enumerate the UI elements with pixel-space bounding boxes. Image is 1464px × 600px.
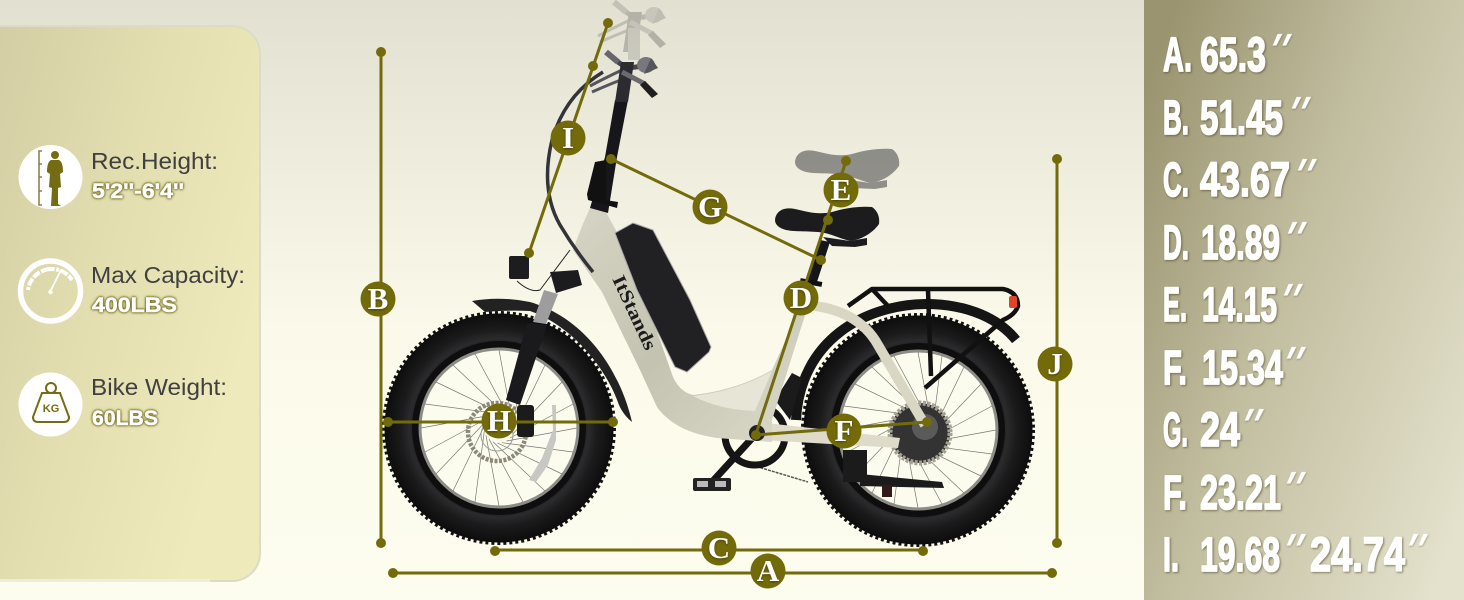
dimension D: D. — [1163, 217, 1189, 270]
badge B — [360, 281, 396, 316]
saddle — [775, 207, 879, 247]
text: max capacity: Max Capacity: — [91, 262, 245, 288]
dimension line A — [388, 568, 1057, 578]
badge H: H — [487, 403, 511, 438]
dimension B — [1163, 87, 1318, 146]
icon: rider height — [18, 145, 82, 209]
dimension C: " — [1277, 149, 1324, 208]
badge C: C — [708, 530, 730, 565]
dimension G: 24 — [1200, 404, 1240, 457]
dimension B: " — [1271, 87, 1318, 146]
dimension F — [1163, 337, 1313, 396]
rear drivetrain and kickstand — [775, 373, 944, 497]
brake cable — [548, 72, 603, 272]
dimension C: 43.67 — [1200, 154, 1290, 207]
dimension lines D and E — [756, 156, 851, 434]
panel: rider specifications — [0, 26, 260, 581]
badge B: B — [368, 281, 388, 316]
chainring and crank with pedal — [693, 405, 785, 491]
rear wheel — [802, 314, 1034, 546]
dimension F second: " — [1266, 462, 1313, 521]
dimension B: B. — [1163, 92, 1189, 145]
icon: bike weight kilogram: KG — [43, 403, 59, 415]
badge A — [750, 553, 786, 588]
dimension A — [1163, 24, 1299, 83]
fork head block — [550, 270, 582, 293]
badge J — [1038, 346, 1072, 382]
bottom bracket — [749, 425, 765, 441]
badge C — [702, 530, 736, 566]
text: recommended height: Rec.Height: — [91, 148, 218, 174]
dimension line G — [606, 154, 826, 265]
seat post — [805, 240, 830, 285]
dimension E: 14.15 — [1202, 279, 1277, 332]
dimension D — [1163, 212, 1314, 271]
rear fender — [796, 304, 1016, 420]
badge E: E — [831, 172, 851, 207]
dimension I: I. — [1163, 529, 1179, 582]
text: max capacity: 400LBS — [92, 294, 177, 317]
dimension I — [1163, 524, 1435, 583]
frame chain stay — [762, 423, 900, 448]
text: max capacity — [91, 262, 245, 317]
frame top stay — [806, 305, 925, 425]
dimension G — [1163, 399, 1271, 458]
text: bike weight: 60LBS — [92, 407, 158, 430]
ghost raised handlebar — [598, 2, 666, 60]
dimension F: 15.34 — [1202, 342, 1283, 395]
handlebar — [590, 52, 658, 102]
dimension I: 19.68 — [1200, 529, 1280, 582]
badge G: G — [698, 189, 722, 224]
dimension B: 51.45 — [1200, 92, 1283, 145]
badge I: I — [562, 120, 574, 155]
dimension E: " — [1263, 274, 1310, 333]
badge D — [784, 280, 818, 316]
dimension A: A. — [1163, 29, 1192, 82]
dimension C — [1163, 149, 1324, 208]
fork stanchion — [533, 290, 558, 324]
dimension E — [1163, 274, 1310, 333]
tail light — [1009, 296, 1017, 308]
dimension line I — [524, 18, 613, 258]
rear disc and motor — [890, 403, 950, 463]
dimension G: " — [1224, 399, 1271, 458]
stem — [590, 100, 628, 213]
front brake disc — [468, 403, 526, 461]
rear rack — [848, 289, 1018, 388]
dimension F: " — [1266, 337, 1313, 396]
dimension I: " — [1388, 524, 1435, 583]
dimension line H — [383, 417, 618, 427]
panel bottom glow — [0, 579, 210, 582]
dimension I: " — [1266, 524, 1313, 583]
icon: max capacity gauge — [20, 261, 80, 321]
badge F — [826, 413, 862, 448]
panel: dimension list — [1144, 0, 1464, 600]
dimension D: " — [1267, 212, 1314, 271]
badge J: J — [1047, 346, 1063, 381]
dimension line B — [376, 47, 386, 548]
bike frame — [573, 208, 806, 442]
badge E — [824, 172, 858, 208]
dimension F second — [1163, 462, 1313, 521]
front fender — [472, 299, 632, 422]
dimension F second: F. — [1163, 467, 1187, 520]
badge I — [550, 120, 586, 156]
headlight — [509, 250, 570, 291]
dimension I: 24.74 — [1310, 529, 1405, 582]
badge D: D — [790, 280, 812, 315]
brand name: ItStands — [607, 272, 660, 354]
chain — [745, 463, 808, 482]
fork reflector bracket — [529, 405, 556, 482]
dimension E: E. — [1163, 279, 1187, 332]
front wheel — [384, 312, 614, 544]
quick-release clamp — [587, 160, 618, 208]
badge H — [482, 403, 516, 438]
dimension A: " — [1252, 24, 1299, 83]
icon: bike weight kilogram — [18, 372, 82, 436]
dimension C: C. — [1163, 154, 1189, 207]
text: bike weight: Bike Weight: — [91, 374, 227, 400]
dimension G: G. — [1163, 404, 1188, 457]
dimension line F — [751, 417, 932, 440]
dimension F second: 23.21 — [1200, 467, 1281, 520]
dimension line C — [490, 546, 928, 556]
battery — [615, 223, 711, 372]
dimension F: F. — [1163, 342, 1187, 395]
bike illustration — [384, 2, 1034, 546]
text: bike weight — [91, 374, 227, 430]
ghost raised saddle — [795, 149, 899, 189]
dimension A: 65.3 — [1200, 29, 1266, 82]
dimension D: 18.89 — [1201, 217, 1280, 270]
badge G — [692, 189, 728, 224]
dimension line J — [1052, 154, 1062, 548]
front brake caliper — [517, 405, 534, 437]
badge F: F — [835, 413, 853, 448]
text: recommended height — [91, 148, 218, 203]
front fork — [506, 323, 547, 405]
badge A: A — [757, 553, 780, 588]
frame gusset — [693, 371, 772, 411]
text: recommended height: 5'2''-6'4'' — [92, 180, 184, 203]
